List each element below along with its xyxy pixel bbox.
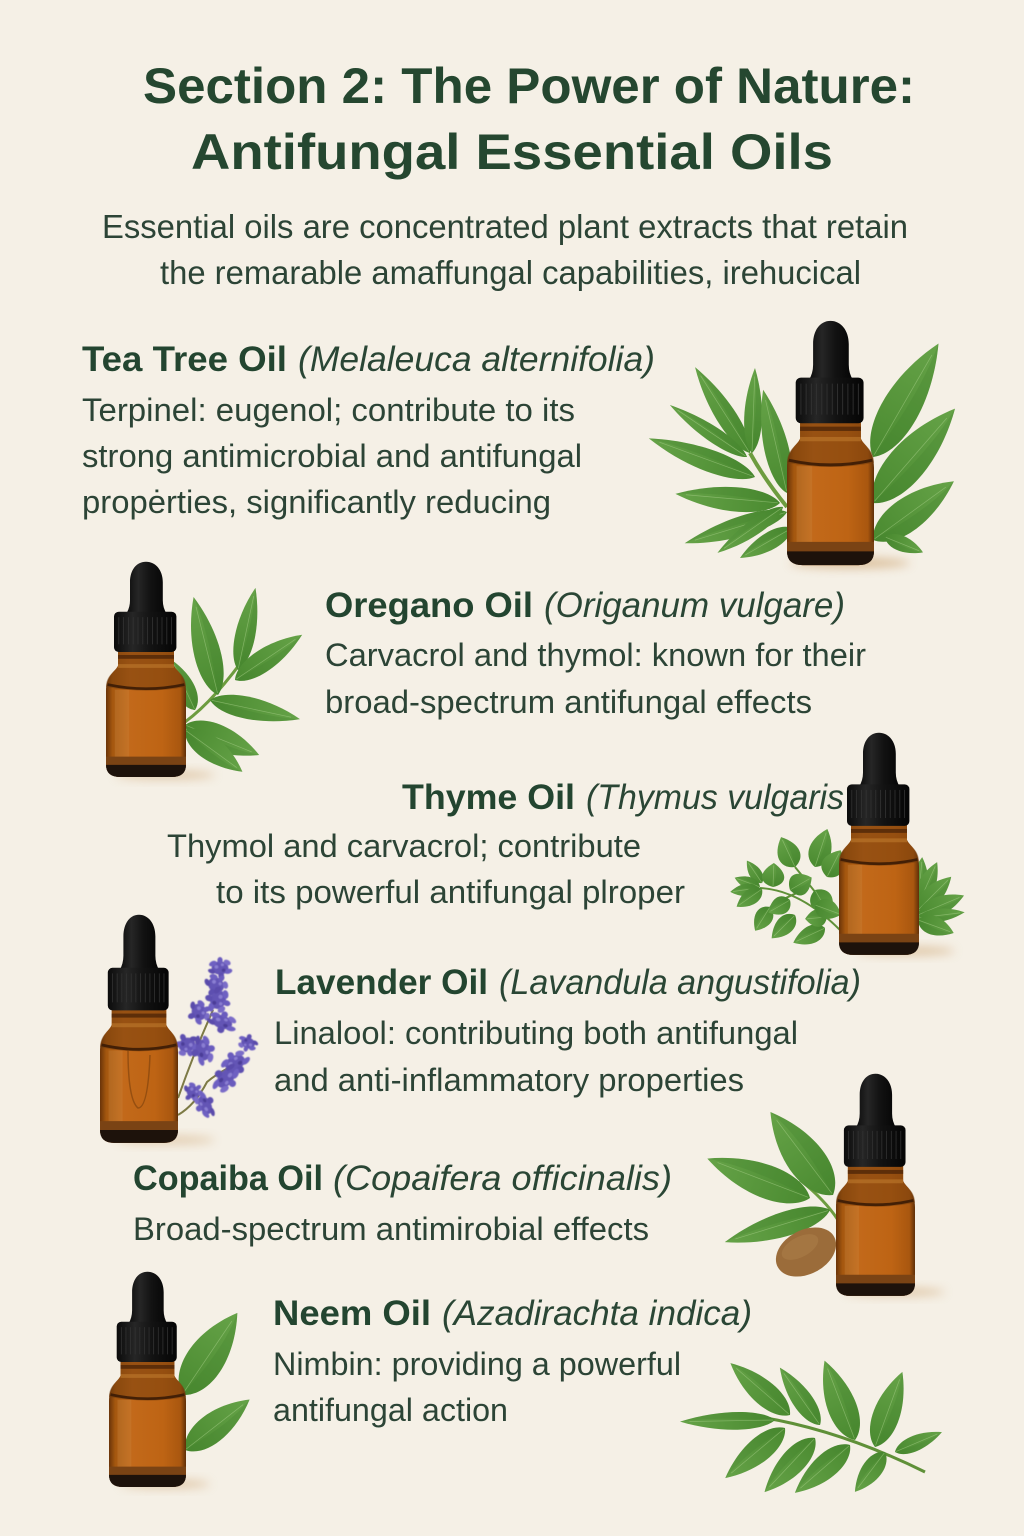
heading: neem oil: Neem Oil [273,1294,431,1333]
panel: tea tree oil [82,321,969,568]
heading: tea tree oil: Tea Tree Oil [82,340,287,379]
heading: lavender oil: (Lavandula angustifolia) [499,963,861,1002]
panel: neem oil [109,1272,945,1502]
heading: thyme oil: Thyme Oil [402,778,575,817]
description: tea tree oil: Terpinel: eugenol; contribute to its [82,392,575,428]
heading: oregano oil: Oregano Oil [325,586,533,625]
description: neem oil: antifungal action [273,1392,508,1428]
icon: oregano bottle with leaves [106,562,308,781]
heading: oregano oil [325,586,845,625]
heading: thyme oil: (Thymus vulgaris [586,778,844,817]
description: neem oil [273,1346,681,1428]
intro text: the remarable amaffungal capabilities, irehucical [160,254,861,291]
description: thyme oil: Thymol and carvacrol; contribute [167,828,641,864]
heading: lavender oil: Lavender Oil [275,963,488,1002]
icon: copaiba bottle with leaves and nut [701,1074,945,1296]
title [143,58,915,180]
icon: tea tree bottle with leaves [645,321,969,568]
heading: neem oil [273,1294,752,1333]
description: oregano oil: broad-spectrum antifungal effects [325,684,812,720]
description: lavender oil: and anti-inflammatory properties [274,1062,744,1098]
panel: thyme oil [167,733,968,955]
heading: lavender oil [275,963,861,1002]
heading: copaiba oil: Copaiba Oil [133,1159,323,1198]
panel: oregano oil [106,562,866,781]
description: tea tree oil: propėrties, significantly reducing [82,484,551,520]
description: thyme oil: to its powerful antifungal plroper [216,874,685,910]
intro text: Essential oils are concentrated plant extracts that retain [102,208,908,245]
heading: thyme oil [402,778,844,817]
heading: tea tree oil [82,340,655,379]
icon: neem branch [680,1354,945,1502]
intro text [102,208,908,291]
description: copaiba oil: Broad-spectrum antimirobial effects [133,1211,649,1247]
heading: copaiba oil: (Copaifera officinalis) [333,1159,672,1198]
panel: copaiba oil [133,1074,945,1296]
heading: neem oil: (Azadirachta indica) [442,1294,752,1333]
dropper tube reflection [128,1050,150,1108]
title: Antifungal Essential Oils [191,124,833,180]
description: oregano oil [325,637,866,720]
title: Section 2: The Power of Nature: [143,58,915,114]
heading: tea tree oil: (Melaleuca alternifolia) [298,340,655,379]
heading: oregano oil: (Origanum vulgare) [544,586,845,625]
description: oregano oil: Carvacrol and thymol: known for their [325,637,866,673]
description: tea tree oil: strong antimicrobial and antifungal [82,438,582,474]
description: lavender oil: Linalool: contributing both antifungal [274,1015,798,1051]
icon: lavender bottle with flowers [100,915,261,1144]
description: neem oil: Nimbin: providing a powerful [273,1346,681,1382]
panel: lavender oil [100,915,861,1144]
icon: copaiba nut [767,1218,845,1286]
description: thyme oil [167,828,685,910]
heading: copaiba oil [133,1159,672,1198]
icon: neem bottle with leaves [109,1272,258,1488]
description: lavender oil [274,1015,798,1098]
icon: thyme bottle with sprig [729,733,968,955]
description: tea tree oil [82,392,582,520]
